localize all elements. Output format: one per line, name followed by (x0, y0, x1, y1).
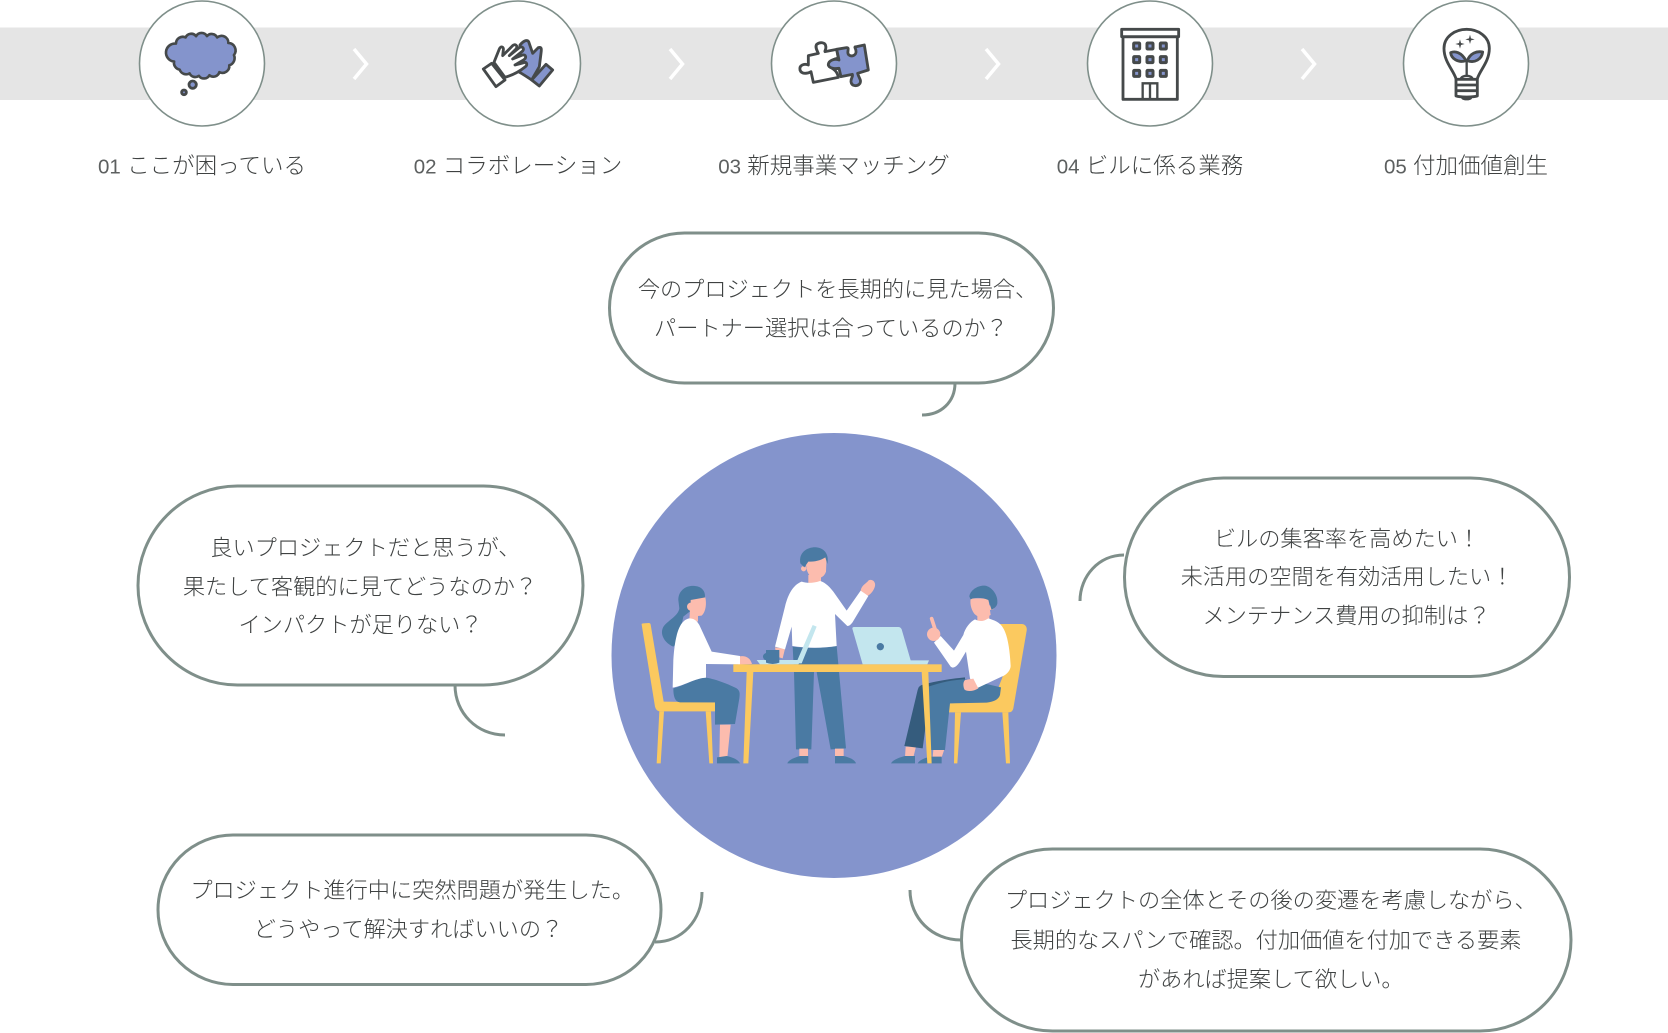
man seated on right (891, 586, 1027, 763)
label 03: 03 新規事業マッチング (718, 154, 950, 178)
icon: thought bubble (166, 33, 236, 95)
bubble text: 未活用の空間を有効活用したい！ (1181, 564, 1513, 590)
speech bubble: bottom left (158, 835, 702, 984)
meeting table (733, 664, 942, 763)
bubble text: ビルの集客率を高めたい！ (1214, 526, 1480, 552)
bubble text: メンテナンス費用の抑制は？ (1202, 604, 1490, 628)
central circle (612, 433, 1056, 878)
label 05: 05 付加価値創生 (1384, 154, 1548, 178)
label 04: 04 ビルに係る業務 (1057, 154, 1243, 178)
bubble text: 長期的なスパンで確認。付加価値を付加できる要素 (1011, 928, 1521, 953)
bubble text: 良いプロジェクトだと思うが、 (210, 536, 520, 560)
step 02 (414, 1, 622, 178)
bubble text: どうやって解決すればいいの？ (254, 917, 563, 942)
bubble text: 今のプロジェクトを長期的に見た場合、 (638, 277, 1037, 302)
laptop and mug on table, left (757, 625, 817, 664)
laptop on table, right (852, 627, 929, 664)
chevron arrow 3 (986, 49, 998, 79)
speech bubble: top (610, 233, 1054, 415)
bubble text: インパクトが足りない？ (238, 612, 483, 638)
process band (0, 28, 1668, 100)
label 01: 01 ここが困っている (98, 154, 306, 178)
speech bubble: right (1080, 478, 1570, 676)
woman seated on left (642, 586, 752, 763)
label 02: 02 コラボレーション (414, 154, 622, 178)
illustration: team meeting around table (642, 547, 1027, 763)
chevron arrow 4 (1302, 49, 1314, 79)
bubble text: プロジェクト進行中に突然問題が発生した。 (190, 878, 634, 903)
bubble text: プロジェクトの全体とその後の変遷を考慮しながら、 (1005, 888, 1537, 913)
bubble text: 果たして客観的に見てどうなのか？ (183, 574, 537, 600)
icon: high five hands (483, 41, 553, 87)
chevron arrow 1 (354, 49, 366, 79)
bubble text: パートナー選択は合っているのか？ (654, 316, 1008, 341)
bubble text: があれば提案して欲しい。 (1138, 967, 1404, 992)
icon: office building (1122, 29, 1179, 99)
speech bubble: bottom right (910, 849, 1571, 1031)
step 03 (718, 1, 950, 178)
step 04 (1057, 1, 1243, 178)
icon: light bulb with sprout (1444, 29, 1489, 99)
speech bubble: left (138, 486, 583, 735)
step 01 (98, 1, 306, 178)
icon: puzzle pieces (800, 43, 868, 86)
man standing in centre (775, 547, 875, 763)
chevron arrow 2 (670, 49, 682, 79)
step 05 (1384, 1, 1548, 178)
